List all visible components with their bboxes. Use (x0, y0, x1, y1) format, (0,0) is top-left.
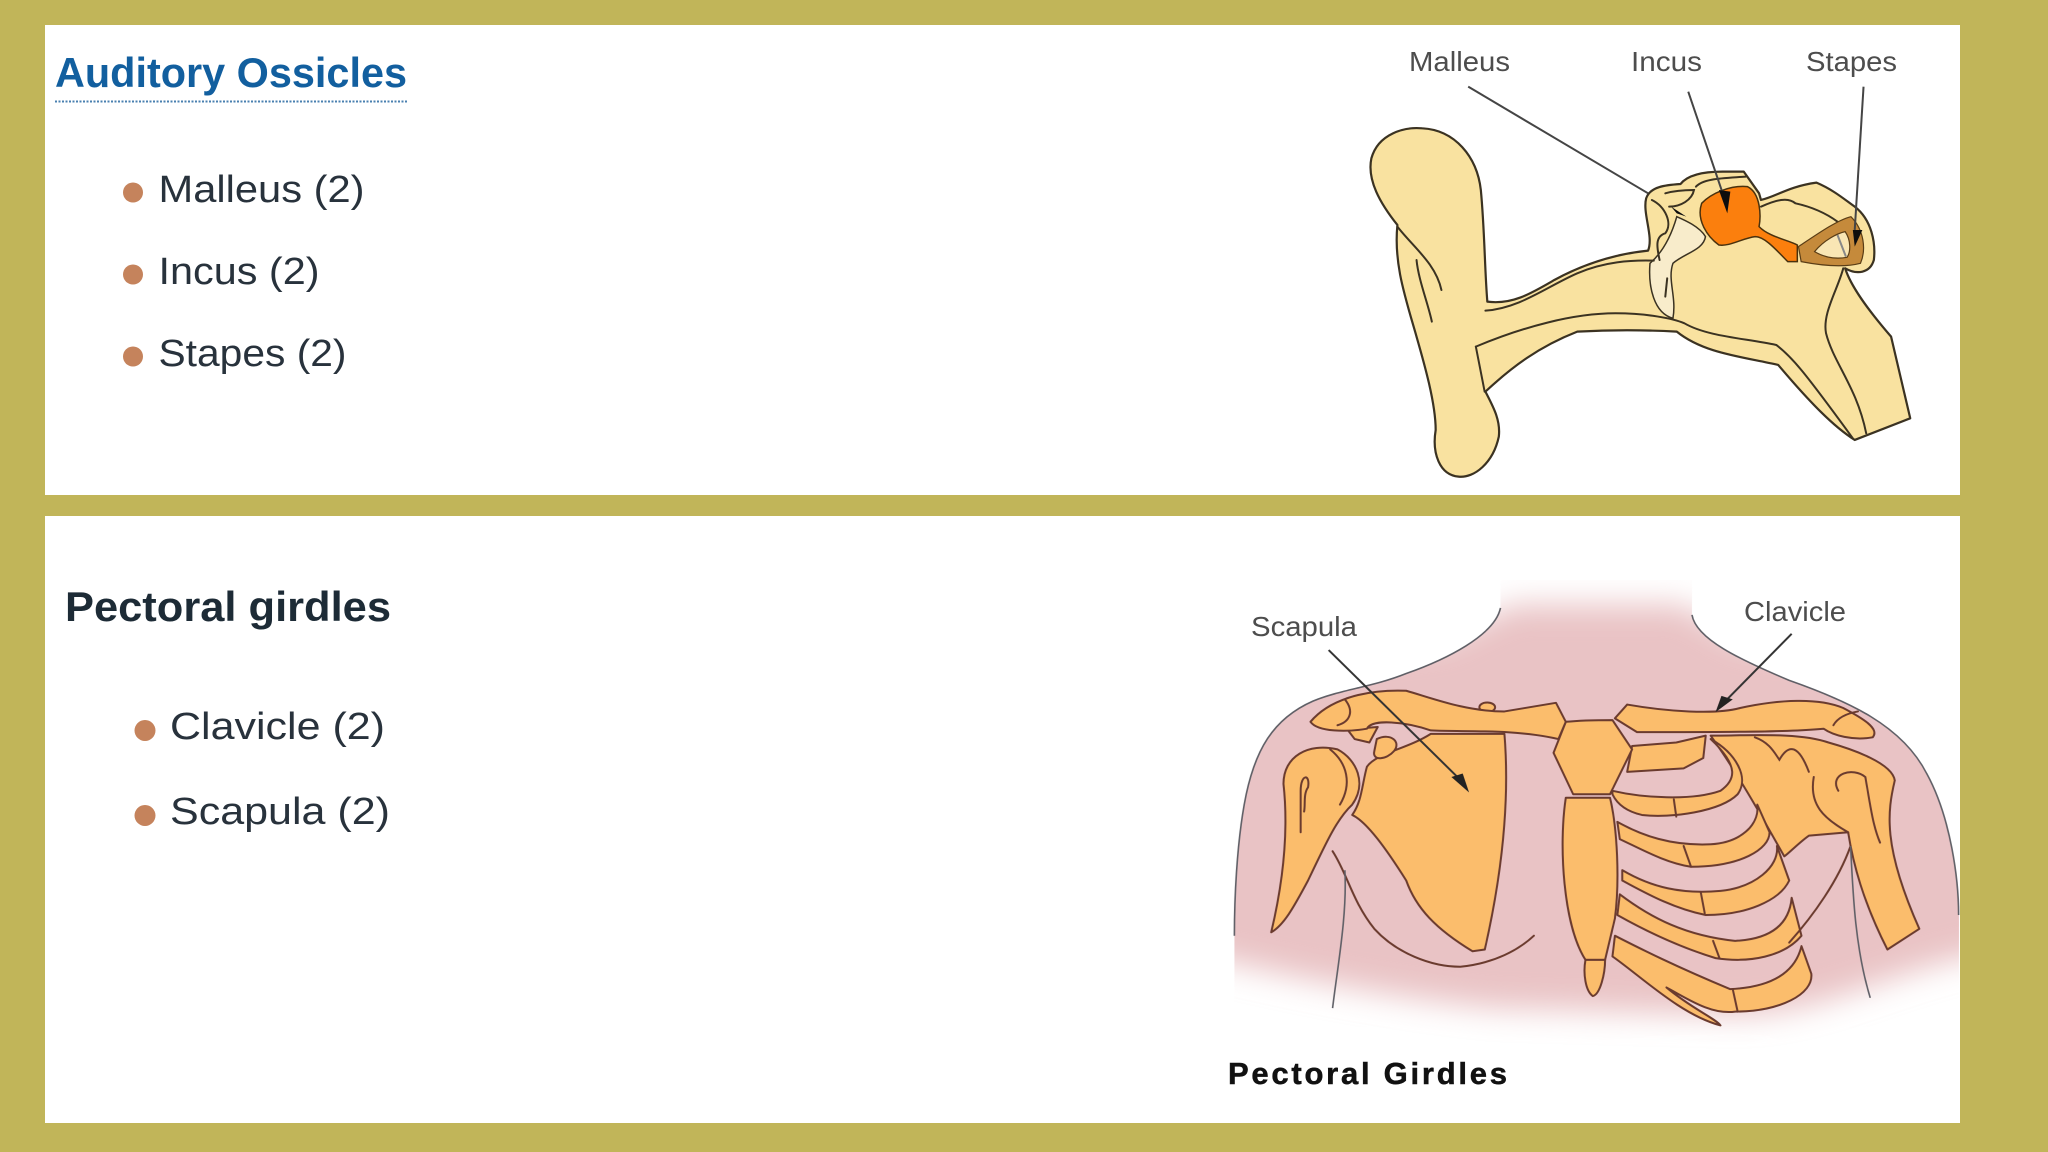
humerus and scapula left (1271, 727, 1506, 951)
panel: pectoral girdles (45, 516, 2035, 1123)
ear silhouette (1370, 128, 1910, 477)
labels: ossicle names (1409, 46, 1897, 77)
humerus and scapula right (1711, 735, 1919, 950)
labels: girdle diagram: Scapula (1251, 611, 1357, 642)
diagram: ear anatomy (1370, 87, 1910, 477)
eardrum (1650, 217, 1705, 318)
labels: ossicle names: Malleus (1409, 46, 1510, 77)
diagram: pectoral girdle anatomy (1233, 588, 1960, 1031)
clavicles (1310, 691, 1874, 739)
labels: ossicle names: Stapes (1806, 46, 1897, 77)
body lines (1333, 846, 1870, 1008)
incus highlight (1700, 186, 1797, 262)
labels: girdle diagram: Pectoral Girdles (1228, 1056, 1507, 1091)
bullet list: girdle bones (134, 706, 390, 833)
canal and helix lines (1397, 177, 1866, 438)
bullet list: ossicles: Incus (2) (158, 251, 320, 293)
sternum (1554, 720, 1632, 996)
ribs (1612, 736, 1811, 1025)
bullet list: ossicles: Malleus (2) (158, 169, 364, 211)
stapes ring (1798, 217, 1864, 266)
bottom fade (1180, 1050, 1976, 1094)
labels: ossicle names: Incus (1631, 46, 1702, 77)
bullet list: girdle bones: Scapula (2) (170, 791, 390, 833)
bullet list: ossicles (123, 169, 364, 375)
heading: Pectoral girdles: Pectoral girdles (65, 583, 391, 630)
leader lines (1468, 87, 1864, 247)
labels: girdle diagram: Clavicle (1744, 596, 1846, 627)
arrow: clavicle (1716, 634, 1792, 712)
arrow: scapula (1329, 650, 1469, 793)
body background (1234, 588, 1959, 1031)
body outline (1234, 608, 1959, 936)
bullet list: girdle bones: Clavicle (2) (170, 706, 385, 748)
bullet list: ossicles: Stapes (2) (158, 333, 346, 375)
panel: auditory ossicles (45, 25, 1960, 495)
labels: girdle diagram (1228, 596, 1846, 1091)
heading: Auditory Ossicles: Auditory Ossicles (55, 49, 407, 96)
